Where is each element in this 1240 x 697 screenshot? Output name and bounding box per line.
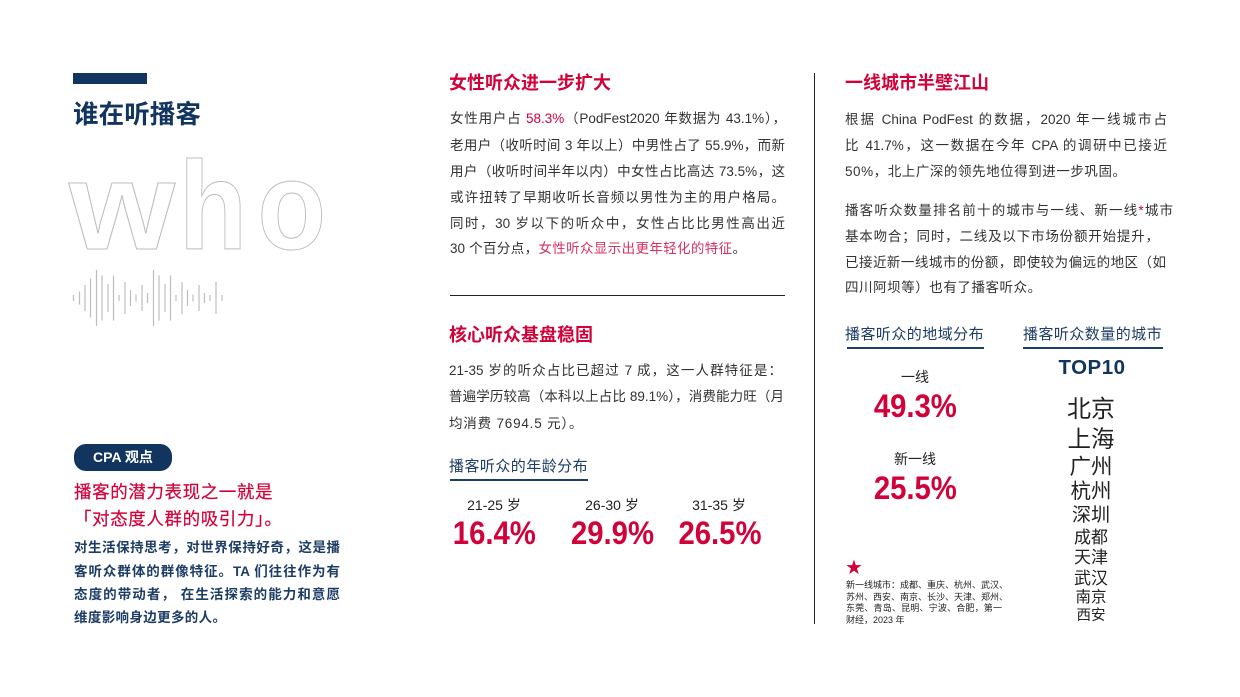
badge: CPA viewpoint xyxy=(74,444,172,471)
stat: 26-30 xyxy=(571,497,654,551)
city ranking list: 武汉 xyxy=(1074,569,1108,588)
footnote text: 苏州、西安、南京、长沙、天津、郑州、 xyxy=(846,592,1008,602)
callout body: 对生活保持思考，对世界保持好奇，这是播 xyxy=(74,540,340,555)
callout body xyxy=(74,540,340,625)
top cities heading: 播客听众数量的城市 xyxy=(1023,326,1162,343)
stat: first-tier: 49.3% xyxy=(874,388,957,424)
city ranking list: 南京 xyxy=(1075,589,1106,606)
paragraph: female listeners: 用户（收听时间半年以内）中女性占比高达 73.5%，这 xyxy=(450,164,785,179)
title: 谁在听播客 xyxy=(73,101,201,129)
city ranking list: 天津 xyxy=(1074,548,1108,567)
heading: core listeners: 核心听众基盘稳固 xyxy=(449,325,593,345)
stat: new first-tier xyxy=(874,451,957,506)
panel: first-tier cities xyxy=(845,73,1173,295)
paragraph: city data: 50%，北上广深的领先地位得到进一步巩固。 xyxy=(845,164,1127,179)
city ranking list: 上海 xyxy=(1068,426,1114,452)
paragraph: city data: 比 41.7%，这一数据在今年 CPA 的调研中已接近 xyxy=(845,138,1167,153)
regional distribution heading: 播客听众的地域分布 xyxy=(845,326,984,343)
callout body: 客听众群体的群像特征。TA 们往往作为有 xyxy=(74,564,340,579)
paragraph: female listeners: 或许扭转了早期收听长音频以男性为主的用户格局。 xyxy=(450,190,785,205)
stat: 26-30: 26-30 岁 xyxy=(585,497,639,513)
panel: female listeners xyxy=(449,73,786,256)
heading: first-tier cities: 一线城市半壁江山 xyxy=(845,73,989,93)
footnote star: ★ xyxy=(845,555,863,579)
stat: 21-25: 21-25 岁 xyxy=(467,497,521,513)
footnote text: 新一线城市：成都、重庆、杭州、武汉、 xyxy=(846,580,1008,590)
paragraph: core listeners: 普遍学历较高（本科以上占比 89.1%），消费能力旺（月 xyxy=(449,389,784,404)
footnote text: 财经，2023 年 xyxy=(846,615,905,625)
paragraph: core listeners xyxy=(449,363,784,430)
paragraph: female listeners xyxy=(450,111,786,256)
stat: first-tier xyxy=(874,369,957,424)
paragraph: city data: 根据 China PodFest 的数据，2020 年一线城市占 xyxy=(845,112,1167,127)
paragraph: female listeners: 30 个百分点，女性听众显示出更年轻化的特征。 xyxy=(450,241,746,256)
city ranking list: 西安 xyxy=(1076,608,1106,624)
paragraph: top ten cities: 播客听众数量排名前十的城市与一线、新一线*城市 xyxy=(845,203,1173,218)
paragraph: top ten cities: 基本吻合；同时，二线及以下市场份额开始提升， xyxy=(845,229,1159,244)
paragraph: female listeners: 同时，30 岁以下的听众中，女性占比比男性高出近 xyxy=(450,216,785,231)
panel: core listeners xyxy=(449,325,784,551)
badge: CPA viewpoint: CPA 观点 xyxy=(93,449,153,465)
paragraph: female listeners: 女性用户占 58.3%（PodFest2020 年数据为 43.1%）， xyxy=(450,111,786,126)
age distribution heading: 播客听众的年龄分布 xyxy=(449,458,588,475)
stat: 31-35: 26.5% xyxy=(678,515,762,551)
column divider xyxy=(814,73,815,624)
stat: new first-tier: 新一线 xyxy=(894,451,936,467)
paragraph: top ten cities xyxy=(845,203,1173,295)
top 10 label: TOP10 xyxy=(1058,356,1126,379)
accent bar xyxy=(73,73,147,84)
callout headline xyxy=(74,482,282,529)
city ranking list: 广州 xyxy=(1069,455,1112,479)
icon: sound waveform xyxy=(72,270,223,326)
city ranking list xyxy=(1067,396,1115,624)
outlined word: who xyxy=(68,140,326,260)
stat: first-tier: 一线 xyxy=(901,369,929,385)
paragraph: female listeners: 老用户（收听时间 3 年以上）中男性占了 55.9%，而新 xyxy=(450,138,785,152)
callout body: 维度影响身边更多的人。 xyxy=(74,610,226,625)
paragraph: core listeners: 均消费 7694.5 元）。 xyxy=(449,416,583,430)
paragraph: city data xyxy=(845,112,1167,179)
footnote text: 东莞、青岛、昆明、宁波、合肥，第一 xyxy=(846,603,1002,613)
callout body: 态度的带动者， 在生活探索的能力和意愿 xyxy=(74,587,340,602)
paragraph: top ten cities: 四川阿坝等）也有了播客听众。 xyxy=(845,280,1042,295)
footnote text xyxy=(846,580,1008,625)
stat: 21-25: 16.4% xyxy=(453,515,536,551)
city ranking list: 杭州 xyxy=(1070,480,1112,503)
divider line xyxy=(450,295,785,296)
stat: 31-35 xyxy=(678,497,762,551)
stat: new first-tier: 25.5% xyxy=(874,470,957,506)
stat: 21-25 xyxy=(453,497,536,551)
callout headline: 「对态度人群的吸引力」。 xyxy=(74,509,282,529)
stat: 31-35: 31-35 岁 xyxy=(692,497,746,513)
stat: 26-30: 29.9% xyxy=(571,515,654,551)
city ranking list: 深圳 xyxy=(1072,505,1110,526)
paragraph: top ten cities: 已接近新一线城市的份额，即使较为偏远的地区（如 xyxy=(845,255,1166,270)
city ranking list: 成都 xyxy=(1074,528,1108,547)
heading: female listeners: 女性听众进一步扩大 xyxy=(449,73,611,93)
city ranking list: 北京 xyxy=(1067,396,1115,423)
callout headline: 播客的潜力表现之一就是 xyxy=(74,482,273,502)
paragraph: core listeners: 21-35 岁的听众占比已超过 7 成，这一人群特征是： xyxy=(449,363,782,378)
